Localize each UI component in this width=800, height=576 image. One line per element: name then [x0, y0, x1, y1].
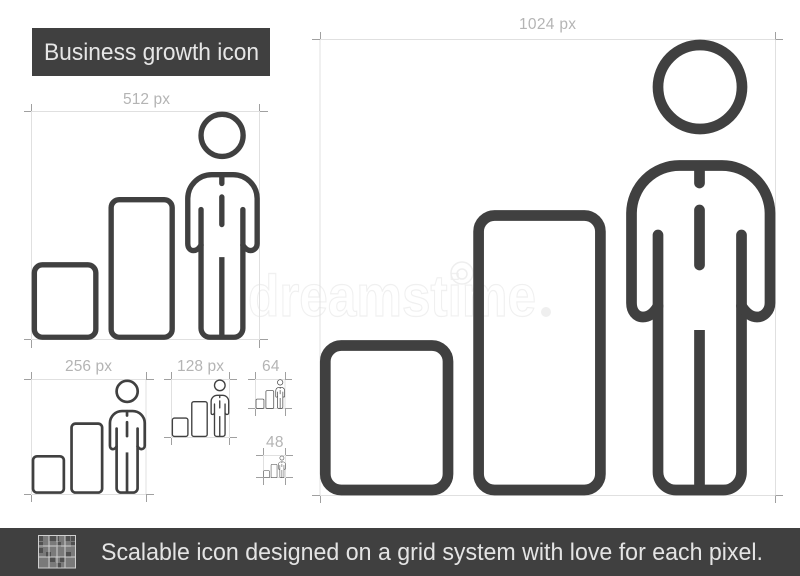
icon size: 128 px — [164, 358, 237, 445]
title: Business growth icon — [44, 39, 259, 66]
icon size: 48 px — [256, 434, 293, 485]
title — [32, 28, 270, 76]
label: 64: 64 — [262, 358, 280, 375]
icon size: 256 px — [24, 358, 154, 502]
watermark: dreamstime — [248, 264, 536, 329]
tagline: Scalable icon designed on a grid system with love for each pixel. — [101, 539, 763, 566]
label: 48: 48 — [266, 434, 284, 451]
icon size: 512 px — [24, 91, 268, 348]
label: 1024 px: 1024 px — [519, 16, 576, 33]
icon: pixel grid — [38, 535, 76, 568]
icon size: 64 px — [248, 358, 292, 416]
label: 128 px: 128 px — [177, 358, 224, 375]
footer bar — [0, 528, 800, 576]
label: 256 px: 256 px — [65, 358, 112, 375]
label: 512 px: 512 px — [123, 91, 170, 108]
